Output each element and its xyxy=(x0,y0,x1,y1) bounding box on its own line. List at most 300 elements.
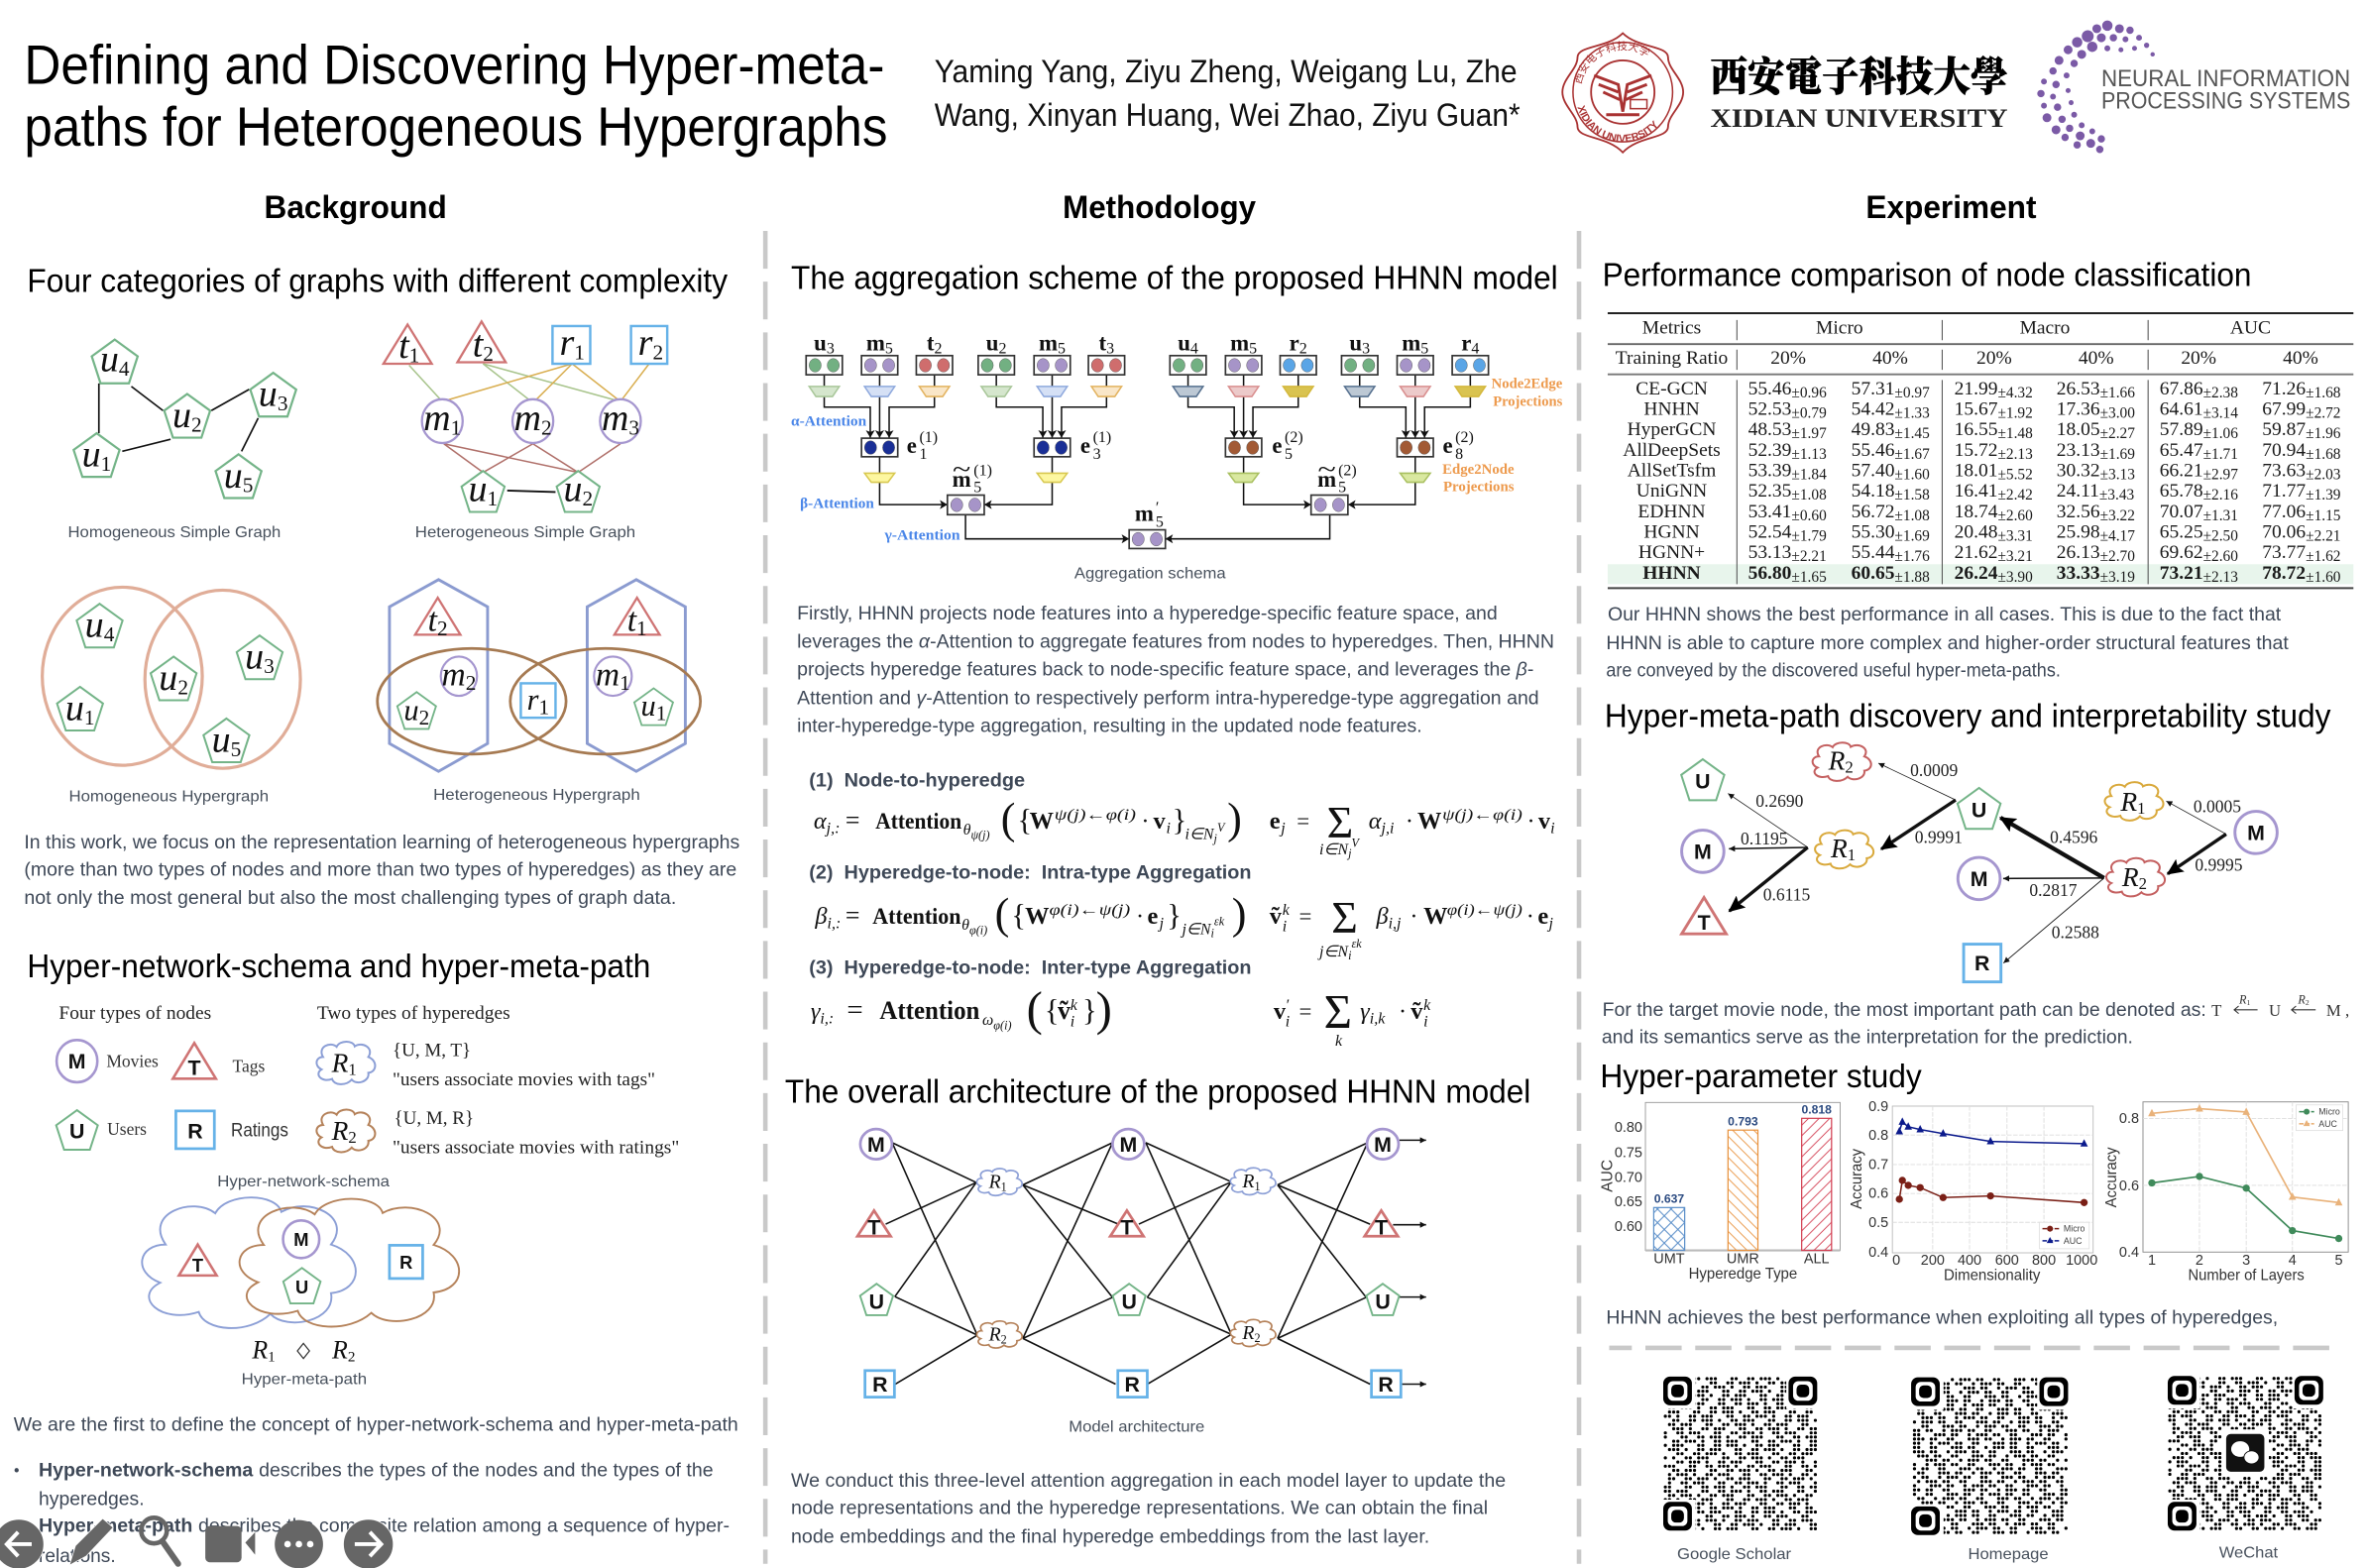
diagram: heterogeneous simple graph: 2 xyxy=(483,342,494,366)
equations: inter-type aggregation: k xyxy=(1423,997,1431,1014)
equations: inter-type aggregation xyxy=(811,982,1431,1050)
table values: ±3.31 xyxy=(1997,528,2033,545)
diagram: heterogeneous simple graph: 1 xyxy=(451,416,461,440)
diagram: heterogeneous hypergraph: 1 xyxy=(620,671,630,695)
table values: 20.48 xyxy=(1955,522,1997,543)
diagram: homogeneous simple graph: 1 xyxy=(101,452,111,476)
table values: 70.06 xyxy=(2262,522,2306,543)
text: three-level attention xyxy=(791,1470,1506,1547)
node labels: ~ xyxy=(953,455,970,484)
table values: 48.53 xyxy=(1748,419,1791,440)
text: path interpretation: For the target movie node, the most important path can be denoted as: xyxy=(1603,999,2206,1021)
chart: accuracy vs dimensionality: 0.8 xyxy=(1868,1128,1888,1144)
diagram: heterogeneous hypergraph: 2 xyxy=(419,706,429,729)
table values: 53.41 xyxy=(1748,502,1791,522)
table values: 55.44 xyxy=(1852,542,1895,563)
attention labels: γ-Attention xyxy=(883,527,960,544)
table values: ±0.79 xyxy=(1791,405,1827,422)
authors xyxy=(935,54,1521,133)
table values: 53.13 xyxy=(1748,542,1791,563)
feature dots xyxy=(809,359,1486,546)
node labels: ′ xyxy=(1156,500,1159,516)
text: performance summary: are conveyed by the discovered useful hyper-meta-paths. xyxy=(1606,659,2061,681)
legend: Micro xyxy=(2064,1224,2085,1234)
equations: intra-type aggregation: ṽ xyxy=(1270,903,1283,930)
node labels: 3 xyxy=(827,340,835,357)
equations: intra-type aggregation: · xyxy=(1136,903,1144,930)
chart: accuracy vs dimensionality: 1000 xyxy=(2066,1253,2097,1269)
table values: ±1.60 xyxy=(1894,467,1930,484)
table values: 65.47 xyxy=(2160,440,2203,461)
diagram: aggregation schema xyxy=(791,330,1562,548)
text: three-level attention: node embeddings and the final hyperedge embeddings from the last layer. xyxy=(791,1525,1429,1547)
equations: node-to-hyperedge: · xyxy=(1406,808,1413,835)
table values: 77.06 xyxy=(2262,502,2306,522)
table header: 40% xyxy=(2079,348,2114,369)
equations: intra-type aggregation: i xyxy=(1348,949,1352,962)
QR code: Google Scholar xyxy=(1661,1375,1821,1534)
formula: hyper-meta-path xyxy=(251,1336,355,1366)
projection labels: Projections xyxy=(1493,393,1562,410)
chart: accuracy vs number of layers: 3 xyxy=(2242,1253,2250,1269)
equations: node-to-hyperedge: { xyxy=(1017,804,1032,838)
equations: inter-type aggregation: = xyxy=(846,994,863,1026)
equations: node-to-hyperedge xyxy=(814,795,1555,860)
chart: accuracy vs dimensionality: 0.4 xyxy=(1868,1245,1888,1261)
chart: AUC by hyperedge type: 0.80 xyxy=(1615,1120,1642,1136)
table values: ±4.17 xyxy=(2100,528,2135,545)
table values: ±1.39 xyxy=(2306,487,2341,504)
node labels: (2) xyxy=(1338,463,1357,480)
projection trapezoids xyxy=(809,387,1486,483)
bullet list: describes the composite relation among a sequence of hyper- xyxy=(198,1515,730,1537)
diagram: heterogeneous hypergraph: t xyxy=(428,603,437,639)
equation heading 1: (1) Node-to-hyperedge xyxy=(809,770,1025,791)
equations: node-to-hyperedge: · xyxy=(1526,808,1535,835)
diagram: heterogeneous simple graph xyxy=(384,321,667,511)
diagram: hyper-meta-path discovery: M xyxy=(1694,840,1712,864)
table values: 73.77 xyxy=(2262,542,2306,563)
table values: ±3.00 xyxy=(2100,405,2135,422)
table values: 65.78 xyxy=(2160,481,2203,502)
node labels: 2 xyxy=(1299,340,1307,357)
node labels: t xyxy=(1099,330,1106,355)
diagram: homogeneous simple graph xyxy=(73,339,296,498)
chart: accuracy vs number of layers: 0.8 xyxy=(2119,1111,2139,1127)
diagram: model architecture: R xyxy=(1125,1373,1140,1397)
table method names: CE-GCN xyxy=(1635,379,1708,399)
equations: inter-type aggregation: γ xyxy=(1360,998,1370,1025)
node labels: m xyxy=(1039,330,1058,355)
heading: hyper-parameter study: Hyper-parameter study xyxy=(1600,1059,1922,1095)
node labels: u xyxy=(1178,330,1190,355)
table values: ±1.66 xyxy=(2100,385,2135,401)
table values: 32.56 xyxy=(2057,502,2100,522)
table method names: HHNN xyxy=(1642,563,1701,584)
equations: node-to-hyperedge: Attention xyxy=(875,809,961,834)
equations: node-to-hyperedge: j xyxy=(1212,832,1218,845)
equations: node-to-hyperedge: v xyxy=(1154,808,1167,835)
diagram: homogeneous hypergraph: 2 xyxy=(177,676,188,700)
authors: Yaming Yang, Ziyu Zheng, Weigang Lu, Zhe xyxy=(935,54,1518,89)
table values: ±2.21 xyxy=(2306,528,2341,545)
node labels: e xyxy=(1272,433,1282,458)
node labels: 8 xyxy=(1455,446,1463,463)
table values: 49.83 xyxy=(1852,419,1894,440)
edge weights: 0.4596 xyxy=(2050,828,2098,847)
chart: accuracy vs number of layers: 0.4 xyxy=(2119,1245,2139,1261)
chart: accuracy vs dimensionality: 400 xyxy=(1958,1253,1981,1269)
bullet list: relations. xyxy=(39,1545,116,1567)
chart: AUC by hyperedge type: 0.637 xyxy=(1654,1192,1684,1206)
diagram: hyper-meta-path discovery: M xyxy=(1971,867,1987,891)
equations: node-to-hyperedge: α xyxy=(1369,808,1382,835)
logo: NeurIPS: NEURAL INFORMATION xyxy=(2101,65,2350,92)
table values: 67.86 xyxy=(2160,379,2203,399)
formula: hyper-meta-path: R xyxy=(252,1336,268,1365)
table header: Micro xyxy=(1816,318,1863,339)
QR code: WeChat xyxy=(2166,1374,2327,1534)
equations: node-to-hyperedge: i∈N xyxy=(1185,827,1215,843)
table values: 70.07 xyxy=(2160,502,2203,522)
chart: accuracy vs dimensionality: 200 xyxy=(1921,1253,1945,1269)
equations: intra-type aggregation: φ(i) xyxy=(969,924,987,938)
table values: 69.62 xyxy=(2160,542,2203,563)
diagram: hyper-meta-path discovery: T xyxy=(1698,911,1711,935)
table values: 53.39 xyxy=(1748,461,1791,482)
table header xyxy=(1616,318,2318,369)
logo: Xidian University seal xyxy=(1561,32,1684,155)
caption: homogeneous hypergraph: Homogeneous Hypergraph xyxy=(68,789,269,806)
diagram: heterogeneous simple graph: 2 xyxy=(541,416,552,440)
equations: intra-type aggregation: W xyxy=(1025,903,1049,930)
table values: ±2.60 xyxy=(1997,507,2033,524)
diagram: model architecture: U xyxy=(1375,1289,1391,1313)
chart: accuracy vs dimensionality: Dimensionality xyxy=(1944,1267,2041,1284)
node labels: (2) xyxy=(1285,429,1303,446)
diagram: homogeneous hypergraph: u xyxy=(212,719,231,760)
node labels: 3 xyxy=(1106,340,1114,357)
table values: ±0.96 xyxy=(1791,385,1827,401)
diagram: heterogeneous hypergraph: t xyxy=(627,603,636,639)
table method names: HNHN xyxy=(1643,399,1700,420)
node labels: 4 xyxy=(1190,340,1198,357)
bullet list: hyperedges. xyxy=(39,1488,145,1510)
chart: accuracy vs dimensionality: 0.9 xyxy=(1868,1099,1888,1115)
equations: intra-type aggregation: εk xyxy=(1351,937,1362,951)
equations: intra-type aggregation: β xyxy=(1376,903,1389,930)
bullet list: Hyper-meta-path xyxy=(39,1515,192,1537)
table values: ±1.08 xyxy=(1791,487,1827,504)
chart: accuracy vs number of layers: Accuracy xyxy=(2103,1147,2120,1207)
diagram: heterogeneous hypergraph: 2 xyxy=(466,671,476,695)
node labels: r xyxy=(1290,330,1299,355)
node labels: e xyxy=(907,433,917,458)
equations: intra-type aggregation: = xyxy=(1299,904,1311,929)
equations: intra-type aggregation: W xyxy=(1423,903,1448,930)
equations: inter-type aggregation: { xyxy=(1045,993,1060,1027)
edge weights: 0.2690 xyxy=(1755,791,1804,811)
table values: 52.39 xyxy=(1748,440,1791,461)
QR code: Homepage xyxy=(1909,1375,2072,1539)
caption: heterogeneous simple graph: Heterogeneous Simple Graph xyxy=(415,524,635,541)
equations: inter-type aggregation: i,: xyxy=(820,1011,834,1028)
equations: node-to-hyperedge: α xyxy=(814,808,827,835)
table values: ±1.06 xyxy=(2203,425,2238,442)
legend: node types: R xyxy=(187,1119,203,1143)
diagram: heterogeneous simple graph: 2 xyxy=(652,340,663,364)
legend: node types: T xyxy=(187,1056,201,1079)
text: path interpretation: R xyxy=(2239,993,2246,1007)
node labels: ~ xyxy=(1318,455,1336,484)
text: three-level attention: node representations and the hyperedge representations. We can obtain the final xyxy=(791,1497,1488,1518)
formula: hyper-meta-path: 2 xyxy=(348,1349,355,1366)
diagram: hyper-meta-path discovery: R xyxy=(2122,862,2139,892)
chart: accuracy vs dimensionality: 600 xyxy=(1995,1253,2019,1269)
node labels: m xyxy=(1230,330,1249,355)
edge weights: 0.2588 xyxy=(2052,922,2099,942)
equations: intra-type aggregation: ( xyxy=(995,890,1009,939)
formula: hyper-meta-path: 1 xyxy=(268,1349,276,1366)
table values: ±1.58 xyxy=(1894,487,1930,504)
chart: accuracy vs dimensionality: 0.6 xyxy=(1868,1186,1888,1202)
legend xyxy=(2296,1105,2343,1131)
node labels: 3 xyxy=(1093,446,1101,463)
legend: hyperedge types: R xyxy=(332,1048,348,1077)
node labels: (1) xyxy=(1093,429,1111,446)
equations: node-to-hyperedge: V xyxy=(1351,836,1360,849)
heading: performance comparison: Performance comparison of node classification xyxy=(1603,258,2251,294)
legend: hyperedge types: {U, M, T} xyxy=(393,1040,471,1061)
equations: node-to-hyperedge: i xyxy=(1166,821,1171,838)
table values: 70.94 xyxy=(2262,440,2306,461)
table values: 16.41 xyxy=(1955,481,1997,502)
table values: 33.33 xyxy=(2057,563,2100,584)
node labels: 1 xyxy=(919,446,927,463)
diagram: homogeneous simple graph: 4 xyxy=(119,357,130,381)
edge weights: 0.9991 xyxy=(1915,828,1963,847)
text: aggregation description: projects hyperedge features back to node-specific feature space, and leverages the β- xyxy=(797,659,1533,681)
table values: ±2.16 xyxy=(2203,487,2238,504)
caption: homogeneous simple graph: Homogeneous Simple Graph xyxy=(68,524,281,541)
table values: ±3.14 xyxy=(2203,405,2238,422)
diagram: homogeneous hypergraph: u xyxy=(65,687,84,728)
caption: Homepage: Homepage xyxy=(1968,1546,2049,1563)
table values: ±1.79 xyxy=(1791,528,1827,545)
table values: ±2.50 xyxy=(2203,528,2238,545)
node labels: 5 xyxy=(1156,513,1164,530)
table values xyxy=(1748,379,2341,586)
node labels: 5 xyxy=(1249,340,1257,357)
equations: intra-type aggregation: e xyxy=(1147,903,1158,930)
diagram: heterogeneous hypergraph: r xyxy=(527,683,539,717)
legend: hyperedge types: "users associate movies with ratings" xyxy=(393,1138,679,1159)
table values: ±1.48 xyxy=(1997,425,2033,442)
node labels: 5 xyxy=(885,340,893,357)
equations: intra-type aggregation: φ(i)←ψ(j) xyxy=(1447,902,1522,919)
chart: AUC by hyperedge type: 0.818 xyxy=(1801,1102,1832,1116)
table header: 40% xyxy=(2283,348,2318,369)
diagram: model architecture: 2 xyxy=(1001,1332,1007,1346)
legend: hyperedge types: Two types of hyperedges xyxy=(317,1003,510,1024)
diagram: model architecture: U xyxy=(1121,1289,1137,1313)
table: node classification results xyxy=(1608,313,2353,588)
legend: node types xyxy=(56,1003,288,1150)
equations: inter-type aggregation: Σ xyxy=(1324,985,1352,1039)
chart: accuracy vs dimensionality: 0.7 xyxy=(1868,1157,1888,1173)
diagram: heterogeneous simple graph: m xyxy=(602,397,628,439)
table values: ±1.31 xyxy=(2203,507,2238,524)
diagram: homogeneous hypergraph: 4 xyxy=(104,622,115,646)
table method names xyxy=(1623,379,1721,584)
equations: intra-type aggregation: j xyxy=(1547,916,1554,933)
projection labels: Projections xyxy=(1443,479,1515,496)
equations: inter-type aggregation: ( xyxy=(1027,982,1043,1036)
equation heading 2: (2) Hyperedge-to-node: Intra-type Aggregation xyxy=(809,862,1252,883)
caption: model architecture: Model architecture xyxy=(1069,1419,1204,1436)
legend: node types: M xyxy=(68,1050,86,1073)
equations: intra-type aggregation: = xyxy=(845,901,859,930)
table values: 73.21 xyxy=(2160,563,2203,584)
connector lines xyxy=(825,375,1470,539)
logo: Xidian wordmark: XIDIAN UNIVERSITY xyxy=(1711,104,2008,133)
text: path interpretation: R xyxy=(2298,993,2306,1007)
legend xyxy=(2040,1222,2089,1249)
attention labels: α-Attention xyxy=(791,412,867,429)
diagram: homogeneous simple graph: u xyxy=(100,339,119,381)
text: path interpretation xyxy=(1602,993,2349,1048)
table values: 18.01 xyxy=(1955,461,1997,482)
diagram: homogeneous hypergraph: u xyxy=(159,657,177,699)
diagram: heterogeneous simple graph: 1 xyxy=(409,343,419,367)
diagram: model architecture: R xyxy=(872,1373,888,1397)
chart: accuracy vs number of layers: Number of Layers xyxy=(2189,1267,2305,1284)
table header: Training Ratio xyxy=(1616,348,1728,369)
chart: accuracy vs number of layers: 2 xyxy=(2196,1253,2203,1269)
equations: node-to-hyperedge: Σ xyxy=(1327,797,1353,847)
table values: 55.46 xyxy=(1852,440,1895,461)
table header: Metrics xyxy=(1642,318,1701,339)
diagram: heterogeneous hypergraph: m xyxy=(596,656,620,693)
logo: Xidian wordmark xyxy=(1711,44,2008,133)
edge weights: 0.2817 xyxy=(2029,880,2078,900)
diagram: hyper-network-schema clouds: M xyxy=(293,1229,308,1250)
heading: four categories: Four categories of graphs with different complexity xyxy=(27,264,728,300)
table method names: UniGNN xyxy=(1636,481,1707,502)
equations: node-to-hyperedge: θ xyxy=(963,822,971,839)
diagram: homogeneous hypergraph: 5 xyxy=(231,737,241,761)
text: first to define: We are the first to define the concept of hyper-network-schema and hyper-meta-path xyxy=(14,1414,738,1436)
table values: ±2.60 xyxy=(2203,548,2238,565)
overlay: viewer toolbar icons xyxy=(0,1517,394,1568)
diagram: heterogeneous simple graph: u xyxy=(563,469,582,510)
diagram: heterogeneous hypergraph: 2 xyxy=(437,616,448,640)
node labels xyxy=(814,330,1479,530)
table values: ±4.32 xyxy=(1997,385,2033,401)
chart: accuracy vs dimensionality: 0.5 xyxy=(1868,1215,1888,1231)
table values: 56.72 xyxy=(1852,502,1894,522)
equations: inter-type aggregation: ′ xyxy=(1286,997,1290,1014)
diagram: heterogeneous simple graph: 1 xyxy=(574,340,585,364)
equations: node-to-hyperedge: } xyxy=(1173,804,1186,838)
diagram: model architecture: T xyxy=(1120,1216,1133,1240)
node labels: 4 xyxy=(1471,340,1479,357)
table values: 73.63 xyxy=(2262,461,2306,482)
table values: ±1.68 xyxy=(2306,385,2341,401)
table values: 26.13 xyxy=(2057,542,2100,563)
node labels: m xyxy=(866,330,885,355)
diagram: hyper-network-schema clouds: U xyxy=(295,1277,308,1297)
diagram: homogeneous hypergraph xyxy=(43,587,300,768)
logo: Xidian wordmark: 西安電子科技大學 xyxy=(1711,44,2008,102)
chart: accuracy vs dimensionality: 0 xyxy=(1892,1253,1900,1269)
table values: 26.24 xyxy=(1955,563,1998,584)
node labels: u xyxy=(814,330,827,355)
diagram: heterogeneous simple graph: r xyxy=(559,322,574,364)
node labels: t xyxy=(927,330,935,355)
text: performance summary: HHNN is able to capture more complex and higher-order structural features that xyxy=(1606,632,2289,654)
equations: intra-type aggregation: φ(i)←ψ(j) xyxy=(1049,902,1130,919)
table values: ±2.13 xyxy=(1997,446,2033,463)
section heading: Experiment: Experiment xyxy=(1865,188,2037,225)
text: path interpretation: and its semantics serve as the interpretation for the prediction. xyxy=(1602,1026,2133,1048)
equations: intra-type aggregation: i,j xyxy=(1389,916,1402,933)
node labels: r xyxy=(1461,330,1471,355)
diagram: model architecture: M xyxy=(867,1133,885,1157)
equations: inter-type aggregation: ṽ xyxy=(1058,996,1071,1025)
equations: inter-type aggregation: γ xyxy=(811,998,820,1025)
table values: ±3.43 xyxy=(2099,487,2135,504)
table header: Macro xyxy=(2020,318,2070,339)
equations: inter-type aggregation: i xyxy=(1286,1014,1290,1031)
equations: intra-type aggregation: i,: xyxy=(828,916,841,933)
chart: AUC by hyperedge type: 0.75 xyxy=(1615,1145,1642,1161)
table values: ±2.42 xyxy=(1997,487,2033,504)
table values: ±1.15 xyxy=(2306,507,2341,524)
table values: 24.11 xyxy=(2057,481,2099,502)
section heading: Background: Background xyxy=(265,188,447,225)
diagram: hyper-network-schema clouds: R xyxy=(399,1252,412,1273)
edge weights: 0.0005 xyxy=(2194,796,2241,816)
equations: inter-type aggregation: i xyxy=(1071,1014,1074,1031)
table values: ±3.90 xyxy=(1997,569,2033,586)
diagram: heterogeneous simple graph: 2 xyxy=(582,487,593,510)
legend: node types: Ratings xyxy=(231,1121,288,1142)
table values: 15.72 xyxy=(1955,440,1997,461)
diagram: hyper-meta-path discovery: R xyxy=(1974,952,1989,975)
table values: ±1.69 xyxy=(1894,528,1930,545)
text: aggregation description: inter-hyperedge-type aggregation, resulting in the updated node features. xyxy=(797,716,1422,737)
node labels: m xyxy=(1317,467,1336,492)
table header: 20% xyxy=(1976,348,2012,369)
chart: accuracy vs number of layers: 1 xyxy=(2148,1253,2156,1269)
equations: intra-type aggregation: Σ xyxy=(1331,892,1358,943)
edge weights: 0.9995 xyxy=(2195,855,2243,875)
diagram: hyper-meta-path discovery: U xyxy=(1972,799,1986,823)
diagram: model architecture xyxy=(857,1129,1426,1398)
table values: 54.18 xyxy=(1852,481,1894,502)
node labels: 5 xyxy=(973,479,981,496)
chart: AUC by hyperedge type: AUC xyxy=(1600,1160,1617,1192)
diagram: model architecture: 1 xyxy=(1001,1180,1007,1194)
table values: 21.99 xyxy=(1955,379,1997,399)
diagram: hyper-meta-path discovery: 2 xyxy=(2139,874,2147,893)
text: path interpretation: U xyxy=(2269,1001,2281,1020)
legend: node types: Users xyxy=(107,1119,147,1139)
equations: node-to-hyperedge: e xyxy=(1270,808,1281,835)
chart: AUC by hyperedge type xyxy=(1600,1102,1840,1283)
table values: ±1.33 xyxy=(1894,405,1930,422)
